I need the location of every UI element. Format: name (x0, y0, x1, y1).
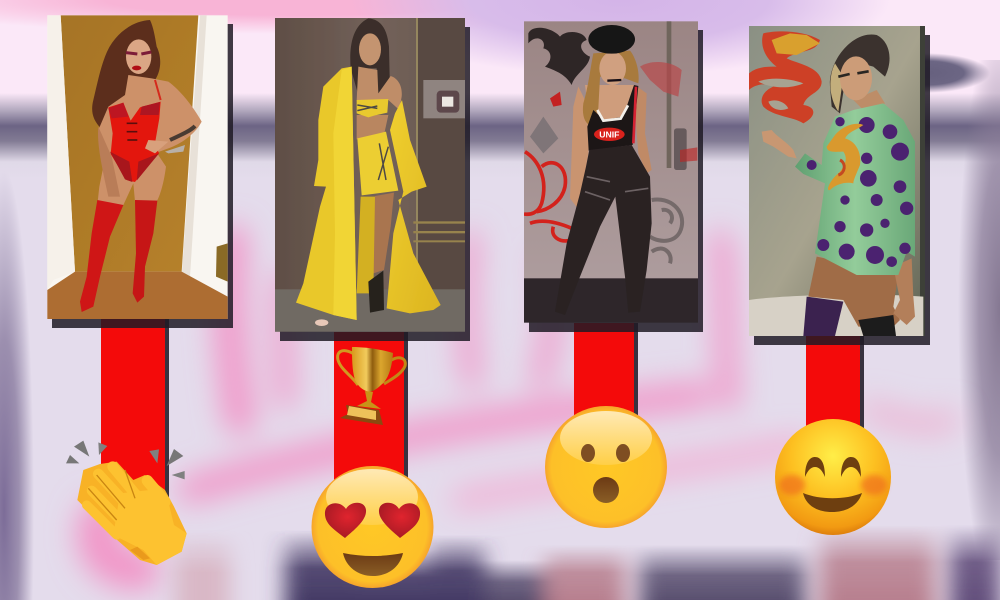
bar 3 with shadow (574, 323, 638, 423)
hair (583, 51, 639, 127)
photo 1: woman in red corset and boots (47, 15, 228, 319)
arm (762, 130, 797, 158)
photo shadow 1 (52, 24, 233, 328)
icon: heart eyes emoji (312, 466, 434, 588)
dragon embroidery (827, 124, 863, 190)
dress (795, 103, 915, 275)
photo shadow 2 (280, 27, 470, 341)
face and chest (359, 33, 381, 65)
photo 2: woman in yellow robe (275, 18, 465, 332)
leg and shoe (373, 193, 394, 273)
hair (92, 20, 160, 135)
top and skirt (357, 99, 388, 117)
hair (830, 34, 890, 113)
face and neck (854, 90, 885, 108)
photo shadow 3 (529, 30, 703, 332)
corset (108, 102, 161, 182)
robe left (296, 67, 357, 320)
icon: smiling blushing emoji (775, 419, 891, 535)
boots (80, 200, 123, 312)
wall ornaments (528, 28, 590, 85)
trousers (560, 145, 652, 278)
bar 4 with shadow (806, 336, 864, 436)
beret (588, 25, 635, 54)
photo 3: woman in beret and leather trousers (524, 21, 698, 323)
bodysuit (587, 85, 638, 151)
skin of body (97, 75, 202, 205)
icon: clapping hands (66, 441, 187, 565)
dragon on wall (749, 31, 822, 123)
legs (808, 257, 900, 327)
photo 4: woman in green dragon dress (749, 26, 925, 336)
photo 3: woman in beret and leather trousers: UNIF (599, 129, 619, 139)
icon: surprised face emoji (545, 406, 667, 528)
bar 1 with shadow (101, 319, 169, 509)
hand and tattoo (170, 126, 195, 140)
photo shadow 4 (754, 35, 930, 345)
face (126, 39, 151, 74)
face (599, 52, 626, 85)
logo (594, 128, 625, 141)
robe right (387, 100, 441, 313)
hair (350, 18, 390, 97)
icon: trophy (338, 347, 405, 425)
bar 2 with shadow (334, 332, 408, 492)
arms and shoulders (570, 87, 590, 209)
